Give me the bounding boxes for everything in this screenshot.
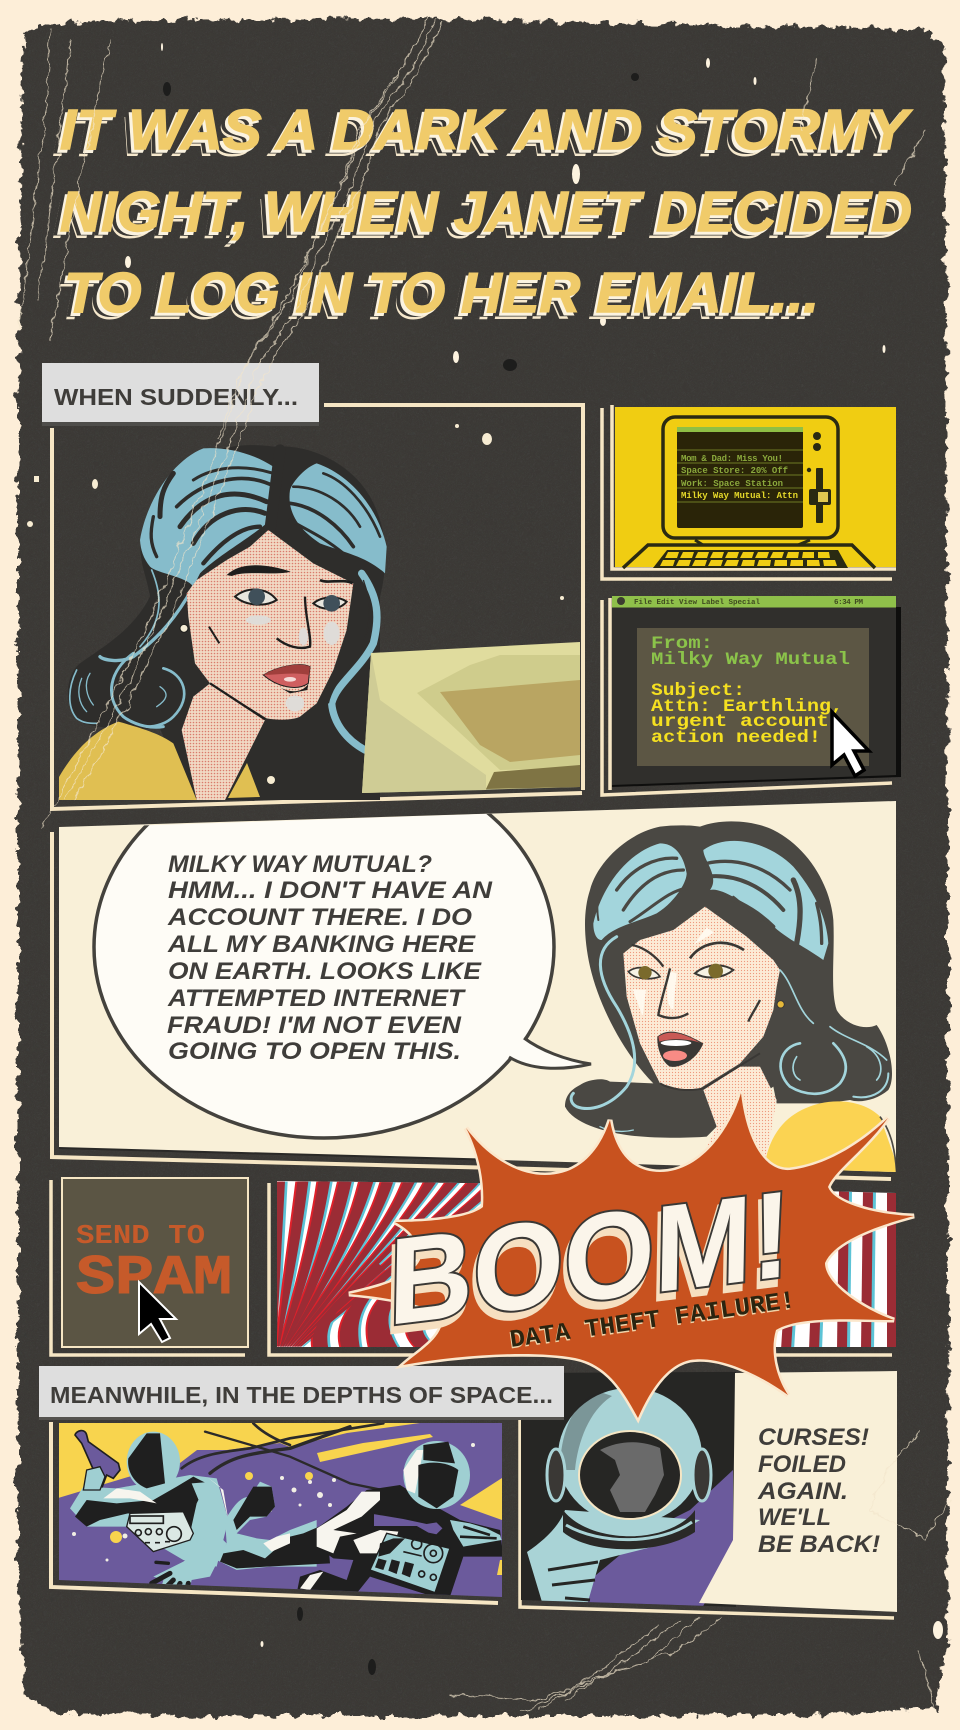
specks xyxy=(27,424,564,784)
title gap layer: IT WAS A DARK AND STORMY xyxy=(53,102,906,166)
caption: meanwhile: MEANWHILE, IN THE DEPTHS OF SPACE... xyxy=(50,1382,553,1408)
blue hair right dome xyxy=(703,841,828,960)
email message box: Milky Way Mutual xyxy=(651,650,850,670)
cream background xyxy=(59,801,896,1172)
email message box: Attn: Earthling, xyxy=(651,697,843,717)
menu bar: File Edit View Label Special xyxy=(634,599,760,607)
email message box: Subject: xyxy=(651,681,745,701)
title shadow layer: IT WAS A DARK AND STORMY xyxy=(52,105,905,169)
icon: black cursor xyxy=(139,1282,176,1342)
speech text: ATTEMPTED INTERNET xyxy=(167,985,467,1012)
frame xyxy=(269,1183,892,1355)
email message box xyxy=(637,628,869,766)
face xyxy=(623,907,780,1090)
hair mass xyxy=(565,821,892,1138)
boom text: BOOM! xyxy=(388,1164,792,1351)
blue hair right dome xyxy=(289,463,387,573)
yellow blouse xyxy=(59,722,260,800)
yellow sky shapes xyxy=(58,1423,420,1498)
neck xyxy=(703,1066,777,1157)
speech bubble xyxy=(92,814,592,1140)
title gap layer: TO LOG IN TO HER EMAIL... xyxy=(57,265,812,329)
blue hair left dome xyxy=(140,448,275,587)
neck xyxy=(182,683,265,800)
menu bar xyxy=(612,596,896,608)
black debris streaks xyxy=(182,1423,390,1492)
speech text: ACCOUNT THERE. I DO xyxy=(167,904,472,931)
astronaut 2 xyxy=(297,1441,503,1597)
panel: speech panel xyxy=(50,801,896,1181)
face features xyxy=(628,927,784,1090)
stripes xyxy=(275,1175,897,1350)
computer monitor back xyxy=(362,642,580,793)
curses text: FOILED xyxy=(758,1451,846,1478)
dark background xyxy=(521,1371,736,1611)
window shadow xyxy=(612,607,901,787)
caption: when suddenly: WHEN SUDDENLY... xyxy=(54,384,298,410)
helmet xyxy=(403,1441,470,1509)
icon: white cursor xyxy=(832,712,869,776)
computer: Milky Way Mutual: Attn xyxy=(681,491,798,501)
caption: when suddenly xyxy=(42,363,319,426)
spam text: SPAM xyxy=(76,1246,232,1310)
face features xyxy=(180,565,353,719)
suit xyxy=(297,1485,503,1597)
reaching glove xyxy=(154,1540,226,1586)
dark blots xyxy=(163,73,639,1675)
tagline: DATA THEFT FAILURE! xyxy=(507,1288,797,1357)
computer: Work: Space Station xyxy=(681,479,783,489)
starburst: boom xyxy=(349,1093,914,1418)
purple sky xyxy=(59,1423,502,1598)
curses text: BE BACK! xyxy=(758,1531,880,1558)
hair mass xyxy=(68,445,385,800)
astronaut helmet xyxy=(527,1388,711,1612)
panel: yellow computer inbox xyxy=(602,405,896,579)
face xyxy=(187,530,353,720)
computer: Mom & Dad: Miss You! xyxy=(681,454,783,464)
curses text xyxy=(757,1424,880,1558)
frame xyxy=(51,1422,498,1603)
speech text: MILKY WAY MUTUAL? xyxy=(168,851,432,878)
hair dark streaks xyxy=(151,450,380,563)
woman 2 xyxy=(565,821,900,1173)
title gap layer: NIGHT, WHEN JANET DECIDED xyxy=(53,184,905,248)
panel: striped background xyxy=(269,1175,897,1355)
blue lower strands xyxy=(571,937,888,1131)
astronaut 1 xyxy=(70,1431,330,1603)
yellow blouse xyxy=(763,1101,900,1173)
stars xyxy=(72,1443,475,1562)
speech text: HMM... I DON'T HAVE AN xyxy=(168,877,493,904)
title main layer xyxy=(60,98,913,325)
panel: send to spam xyxy=(51,1178,248,1355)
chest console xyxy=(127,1512,193,1552)
legs xyxy=(217,1482,317,1570)
title gap layer xyxy=(53,102,906,329)
email message box: From: xyxy=(651,634,713,654)
title highlight layer: NIGHT, WHEN JANET DECIDED xyxy=(57,183,909,247)
computer xyxy=(623,417,875,568)
chest console xyxy=(370,1533,450,1593)
email message box: action needed! xyxy=(651,728,821,748)
panel: Janet at her computer xyxy=(27,405,583,809)
curses text: AGAIN. xyxy=(757,1478,848,1505)
curses text: WE'LL xyxy=(758,1504,831,1531)
hair dark streaks xyxy=(597,858,822,943)
title main layer: TO LOG IN TO HER EMAIL... xyxy=(64,261,819,325)
menu bar: 6:34 PM xyxy=(834,599,863,607)
tagline: DATA THEFT FAILURE! xyxy=(508,1286,797,1355)
title shadow layer: TO LOG IN TO HER EMAIL... xyxy=(56,268,811,332)
woman 1 xyxy=(59,445,387,800)
email message box: urgent account xyxy=(651,712,829,732)
panel: open email window xyxy=(602,596,901,795)
frames xyxy=(602,598,892,795)
speech text: ALL MY BANKING HERE xyxy=(167,931,476,958)
blue hair strands xyxy=(70,570,377,750)
speech text: FRAUD! I'M NOT EVEN xyxy=(167,1012,462,1039)
send to text: SEND TO xyxy=(76,1222,205,1252)
window body xyxy=(612,607,896,785)
helmet xyxy=(126,1432,180,1485)
title shadow layer: NIGHT, WHEN JANET DECIDED xyxy=(52,187,904,251)
purple area xyxy=(580,1470,733,1612)
speech text xyxy=(167,851,493,1065)
boom text: BOOM! xyxy=(384,1172,789,1359)
outer frame xyxy=(51,1180,245,1355)
cream area xyxy=(699,1371,897,1612)
yellow background xyxy=(615,407,896,567)
title highlight layer xyxy=(57,101,910,328)
title xyxy=(52,98,913,332)
frames xyxy=(602,405,896,579)
panel: astronauts in space xyxy=(51,1422,503,1603)
burst cream edge xyxy=(349,1093,914,1418)
burst body xyxy=(349,1093,914,1418)
title highlight layer: TO LOG IN TO HER EMAIL... xyxy=(61,264,816,328)
speech text: ON EARTH. LOOKS LIKE xyxy=(168,958,482,985)
curses text: CURSES! xyxy=(758,1424,869,1451)
title shadow layer xyxy=(52,105,905,332)
frame xyxy=(52,832,891,1179)
caption: meanwhile xyxy=(39,1366,564,1420)
paper specks xyxy=(125,43,943,1647)
wrench tool xyxy=(373,1513,443,1535)
title main layer: IT WAS A DARK AND STORMY xyxy=(60,98,913,162)
computer: Space Store: 20% Off xyxy=(681,466,788,476)
panel: curses foiled again xyxy=(520,1371,897,1618)
title highlight layer: IT WAS A DARK AND STORMY xyxy=(57,101,910,165)
face in visor xyxy=(600,1442,664,1512)
title main layer: NIGHT, WHEN JANET DECIDED xyxy=(60,180,912,244)
frame xyxy=(520,1375,894,1618)
speech text: GOING TO OPEN THIS. xyxy=(168,1038,461,1065)
box xyxy=(62,1178,248,1347)
panel frame xyxy=(52,405,583,809)
suit xyxy=(70,1475,228,1567)
ray gun xyxy=(75,1431,120,1488)
blue hair left dome xyxy=(593,843,687,940)
